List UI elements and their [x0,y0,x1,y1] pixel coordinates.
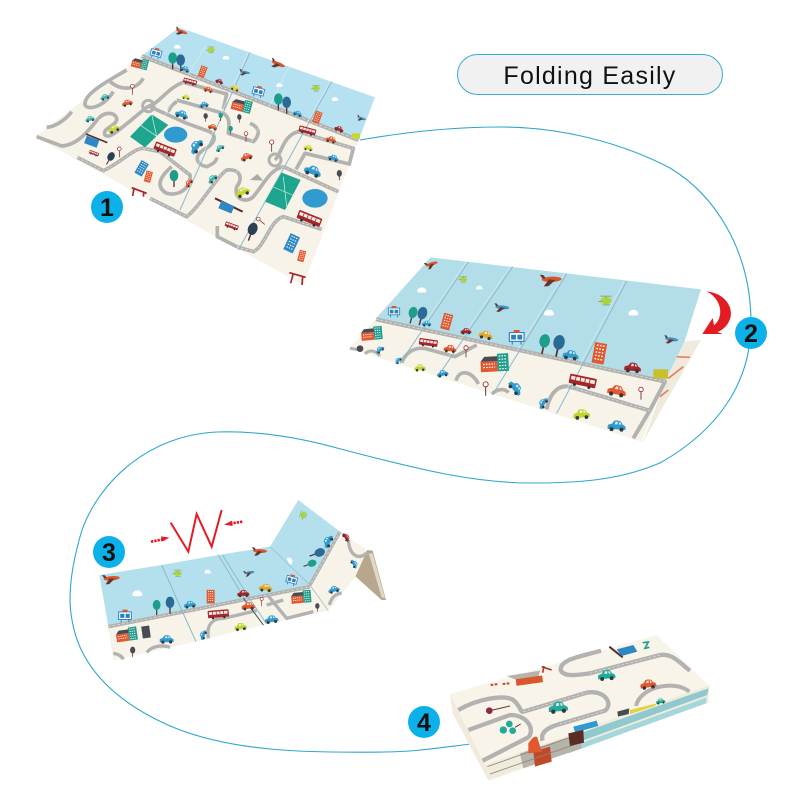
title pill [458,54,722,94]
mat 4 top face [450,635,708,765]
mat 4 side layers [450,685,709,781]
mat 1 sky icons [149,27,367,139]
mat 4 roads [458,651,690,761]
connecting curve between steps [70,127,751,752]
mat 3 fold lines [162,547,328,642]
step 2 badge: 2 [744,320,758,348]
mat 4 printed edge details [487,733,582,774]
step 3 badge [93,536,125,568]
mat 3 back panel edge [369,553,385,598]
mat 2 base [349,318,665,442]
mat 3 flat ground [108,585,328,661]
mat 2 sky icons [388,259,679,379]
mat 1 ponds [164,127,328,208]
step 3 badge: 3 [102,539,116,567]
mat 4 teal side bands [568,688,708,753]
step 4 badge: 4 [417,709,431,737]
mat 2 ground icons [357,326,643,432]
mat 1 fold lines [127,45,332,250]
step 2 red fold arrow [702,291,731,334]
mat 3 upright sky panel [270,500,340,585]
left dotted arrow [151,536,169,542]
step 2 mat, folding in half [349,257,701,442]
step 2 badge [735,317,767,349]
mat 1 base [35,27,375,285]
mat 3 upright cream panel [310,532,367,611]
step 1 mat, fully unfolded [35,27,375,285]
mat 2 fold lines [398,262,627,413]
mat 2 sky [376,257,701,382]
title pill: Folding Easily [503,62,677,90]
mat 2 roads [350,319,665,438]
step 4 badge [408,706,440,738]
mat 3 ground icons [115,532,359,657]
mat 1 tennis courts [130,114,301,210]
right dotted arrow [224,521,242,526]
mat 1 ground icons [84,56,342,285]
mat 2 folded flap [643,340,701,442]
mat 4 icons [486,642,666,753]
red zigzag fold symbol [151,510,242,552]
mat 3 back panel [355,550,386,600]
mat 3 roads [108,532,367,659]
zigzag line [171,510,222,552]
mat 3 sky icons [102,510,334,622]
step 3 mat, folding zigzag [99,500,386,661]
step 4 mat, fully folded stack [450,635,709,781]
mat 1 roads [37,56,358,252]
step 1 badge: 1 [100,194,114,222]
mat 2 flap stripes [660,357,690,397]
step 1 badge [91,191,123,223]
mat 1 sky area [142,27,375,140]
mat 3 flat sky [99,547,310,627]
